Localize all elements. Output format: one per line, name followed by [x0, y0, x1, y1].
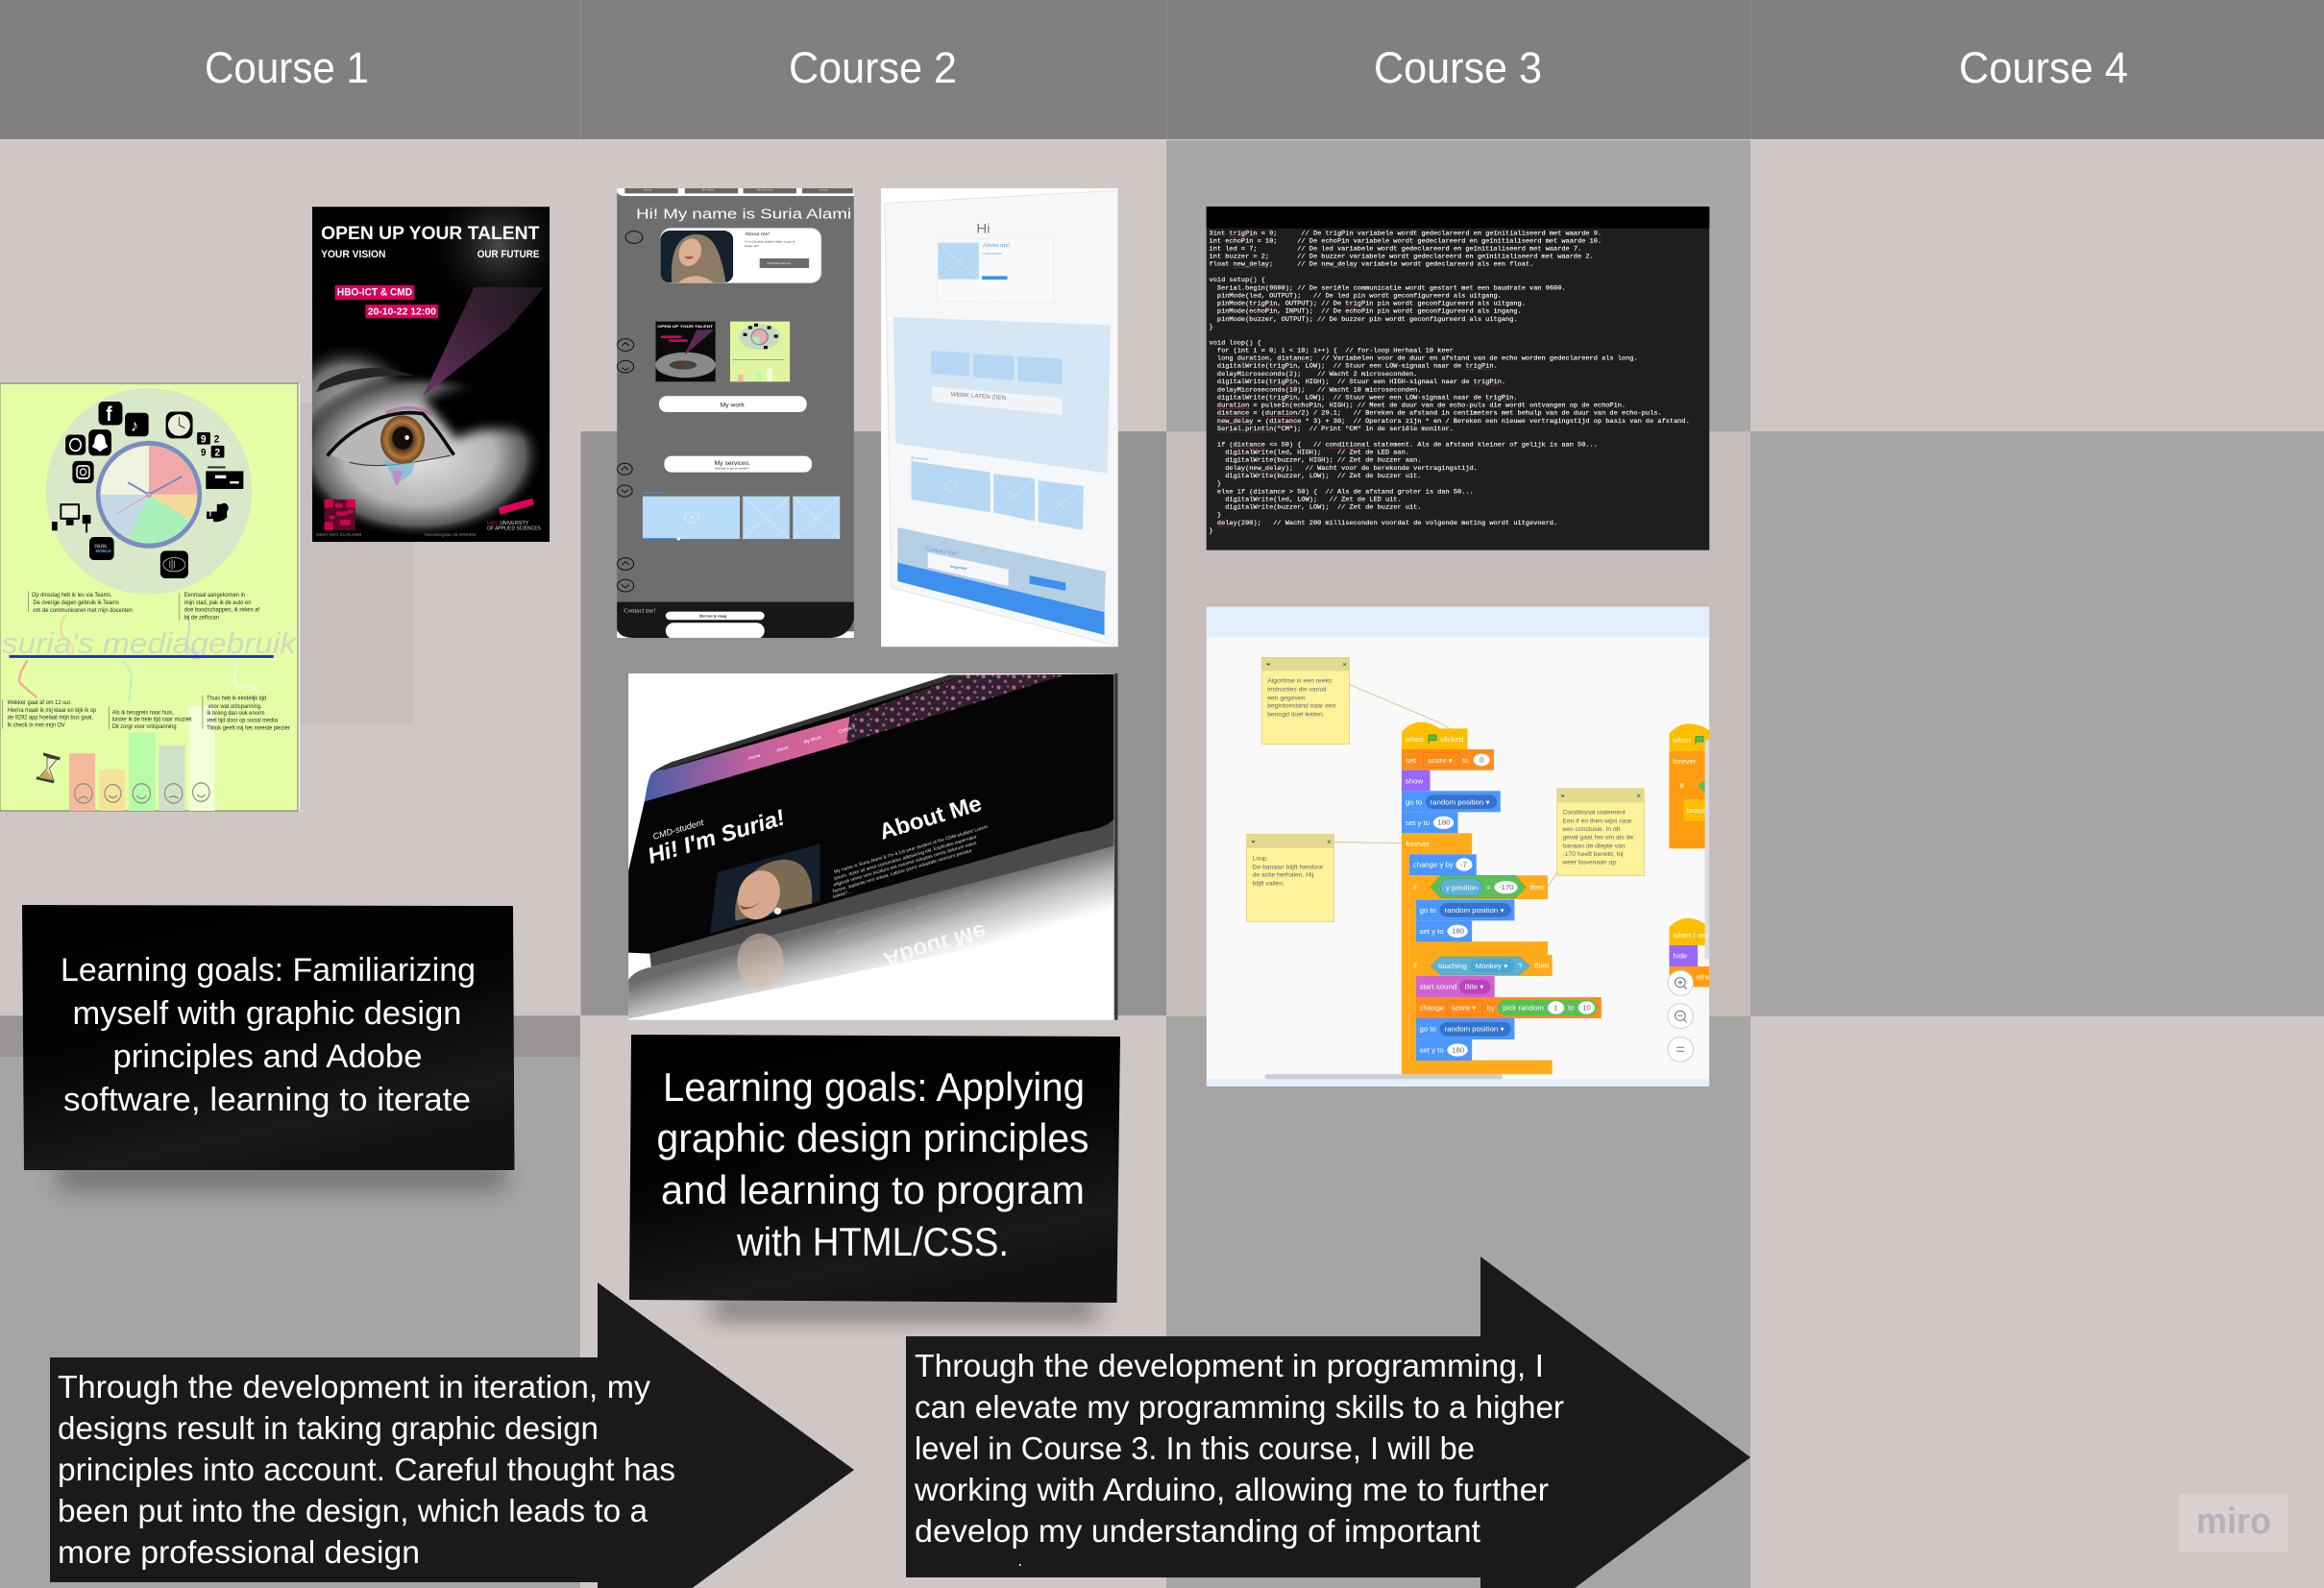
work thumbnails	[655, 322, 790, 381]
code blocks stack: by	[1486, 1004, 1495, 1013]
code blocks stack: y position	[1446, 884, 1478, 892]
text: home note	[202, 696, 290, 731]
code blocks clipped right: forever	[1673, 757, 1697, 766]
note: Conditional statement: Een if en then wijst naar	[1562, 818, 1632, 824]
code blocks stack: if	[1413, 883, 1418, 892]
note: Conditional statement: geval gaat het om als de	[1562, 835, 1634, 842]
code blocks stack: pick random	[1503, 1004, 1544, 1013]
poster sublines	[321, 250, 540, 257]
hero heading: CMD-student	[651, 818, 705, 842]
text: music note: Dit zorgt voor ontspanning	[112, 724, 177, 730]
panel: website wireframe	[881, 188, 1118, 647]
poster logo: HAN_UNIVERSITY	[487, 521, 529, 526]
code listing: pinMode(echoPin, INPUT); // De echoPin pin wordt geconfigureerd als ingang.	[1210, 308, 1522, 316]
panel: arduino code	[1191, 187, 1709, 550]
code listing: }	[1210, 527, 1213, 535]
contact footer: Stel hier je vraag	[699, 614, 726, 618]
code listing: 3int trigPin = 9; // De trigPin variabele wordt gedeclareerd en geïnitialiseerd met waarde 9.	[1210, 231, 1602, 237]
code listing: }	[1210, 512, 1221, 520]
code blocks stack: Monkey ▾	[1476, 962, 1507, 970]
web heading: Hi! My name is Suria Alami	[636, 207, 851, 223]
logo: miro watermark: miro	[2196, 1502, 2271, 1542]
reflection: About Me	[880, 918, 989, 971]
note: Algoritme: ✕	[1342, 662, 1348, 669]
contact footer	[617, 602, 854, 639]
code blocks stack: 180	[1437, 818, 1450, 827]
code blocks stack: to	[1462, 756, 1469, 765]
code blocks stack: then	[1534, 962, 1549, 970]
text: Teams note: Op dinsdag heb ik les via Teams.	[32, 593, 112, 599]
text: iteration reflection: principles into account. Careful thought has	[58, 1453, 675, 1488]
browser bar and gradient nav: My Work	[803, 735, 822, 745]
code listing: digitalWrite(led, HIGH); // Zet de LED aan.	[1210, 450, 1409, 457]
wireframe about card	[937, 238, 1054, 303]
text: alarm note: Ik check in met mijn OV	[8, 722, 65, 729]
note: Loop: ✕	[1327, 840, 1333, 846]
panel: scratch code editor	[1207, 607, 1711, 1087]
code blocks stack: then	[1529, 883, 1545, 892]
text: music note: Als ik terugreis naar huis,	[112, 710, 174, 716]
code blocks stack: random position ▾	[1445, 906, 1504, 915]
code blocks stack: if	[1413, 962, 1418, 970]
code listing: if (distance <= 50) { // conditional statement. Als de afstand kleiner of gelijk is aan 50...	[1210, 441, 1598, 449]
wireframe about card: Lorem ipsum	[982, 252, 1002, 256]
text: iteration reflection: Through the development in iteration, my	[58, 1370, 650, 1405]
code listing: new_delay = (distance * 3) + 30; // Operators zijn * en / Bereken een nieuwe vertragingstijd op basis van de afstand.	[1210, 418, 1690, 426]
code blocks stack: set y to	[1406, 818, 1430, 827]
zoom controls	[1668, 970, 1693, 1062]
code blocks stack: score ▾	[1428, 756, 1453, 765]
poster sublines: OUR FUTURE	[477, 250, 539, 260]
text: self-scan note: Eenmaal aangekomen in	[184, 593, 245, 599]
text: learning goals 2: and learning to program	[661, 1167, 1085, 1212]
text: learning goals 2: Learning goals: Applying	[663, 1064, 1085, 1110]
text: learning goals 2: with HTML/CSS.	[736, 1219, 1009, 1264]
logo: miro watermark	[2179, 1494, 2288, 1552]
note: Algoritme: een gegeven	[1267, 695, 1306, 701]
panel: media use infographic	[0, 383, 300, 811]
code listing: for (int i = 0; i < 10; i++) { // for-loop Herhaal 10 keer	[1210, 348, 1454, 355]
arrow: course 1 to 2	[50, 1283, 854, 1588]
code listing: int buzzer = 2; // De buzzer variabele wordt gedeclareerd en geïnitialiseerd met waarde 2.	[1210, 254, 1594, 261]
code listing: pinMode(trigPin, OUTPUT); // De trigPin pin wordt geconfigureerd als uitgang.	[1210, 301, 1526, 308]
note: Algoritme	[1261, 657, 1350, 745]
code blocks clipped right: when I rec	[1673, 931, 1708, 940]
scroll icons	[617, 232, 643, 592]
text: Teams note: om de communiceren met mijn docenten	[33, 608, 133, 614]
header row	[0, 0, 2324, 140]
code listing: delayMicroseconds(10); // Wacht 10 microseconden.	[1210, 386, 1422, 394]
about heading: About Me	[876, 792, 985, 845]
text: self-scan note: doe boodschappen, ik reken af	[184, 607, 259, 614]
reflection: My name is Suria Alami & I'm a 1st-year student of the CDM-studies! Lorem	[834, 899, 984, 949]
code blocks stack: 180	[1452, 927, 1464, 936]
code listing: }	[1210, 480, 1221, 488]
poster tag: date	[365, 305, 438, 318]
code blocks stack: 0	[1480, 756, 1483, 764]
text: programming reflection: can elevate my programming skills to a higher	[915, 1390, 1564, 1426]
poster logo: Ruitenberglaan 26 ARNHEM	[425, 532, 477, 537]
browser bar and gradient nav	[645, 675, 1064, 801]
services placeholders	[643, 492, 840, 540]
reflection: eligendi nemo veni incidunt nisi maxime voluptas omnis dolorum natus	[833, 889, 973, 936]
text: learning goals 2: graphic design principles	[657, 1115, 1089, 1160]
code blocks stack: change y by	[1413, 861, 1454, 869]
text: home note: Thuis heb ik eindelijk tijd	[207, 696, 266, 702]
poster logo: MEER INFO SCAN HIER	[316, 532, 361, 537]
text: iteration reflection	[58, 1370, 675, 1571]
note: Conditional statement: banaan de diepte van	[1562, 843, 1626, 849]
heading: Course 1: Course 1	[205, 43, 369, 92]
work thumbnails: OPEN UP YOUR TALENT	[657, 325, 714, 329]
code listing: duration = pulseIn(echoPin, HIGH); // Meet de duur van de echo-puls die wordt ontvangen op de echoPin.	[1210, 403, 1626, 410]
heading: Course 2: Course 2	[789, 43, 957, 92]
code blocks stack: =	[1486, 884, 1491, 892]
wireframe services: My services	[911, 455, 928, 461]
code listing: digitalWrite(buzzer, LOW); // Zet de buzzer uit.	[1210, 473, 1422, 480]
code blocks stack: change	[1419, 1004, 1444, 1013]
pill: My work	[659, 396, 807, 412]
code listing: delay(new_delay); // Wacht voor de berekende vertragingstijd.	[1210, 465, 1478, 473]
text: alarm note: de 9292 app hoelaat mijn bus gaat.	[8, 715, 93, 721]
note: Loop: Loop	[1253, 856, 1267, 863]
text: programming reflection: Through the development in programming, I	[915, 1349, 1544, 1384]
code blocks stack: random position ▾	[1445, 1025, 1504, 1034]
code blocks clipped right: if	[1680, 782, 1684, 791]
text: home note: Ik breng dan ook enorm	[207, 711, 265, 717]
code blocks stack: set y to	[1419, 1046, 1444, 1055]
wireframe work section	[893, 317, 1111, 474]
code blocks stack: when	[1405, 735, 1424, 744]
clock dial with apps: 9	[201, 434, 207, 446]
text: home note: Tiktok geeft mij het meeste plezier	[207, 725, 290, 731]
code listing: Serial.println("CM"); // Print "CM" in de seriële monitor.	[1210, 426, 1454, 433]
note: Conditional statement: ✕	[1636, 794, 1642, 800]
panel: learning goals course 1	[22, 905, 515, 1189]
code blocks clipped right: when	[1672, 736, 1691, 745]
poster tag: date: 20-10-22 12:00	[368, 306, 436, 318]
code blocks stack: -7	[1460, 861, 1467, 868]
about paragraph: ipsum, dolor sit amet consectetur adipisicing elit. Explicabo aspernatur	[833, 834, 978, 882]
nav bar	[617, 187, 854, 196]
heading: Course 3: Course 3	[1374, 43, 1542, 92]
code listing: digitalWrite(trigPin, LOW); // Stuur een LOW-signaal naar de trigPin.	[1210, 363, 1498, 371]
note: Conditional statement: weer bovenaan op	[1561, 859, 1616, 866]
wireframe contact	[897, 527, 1106, 635]
nav bar: contact	[819, 187, 829, 191]
contact footer: Contact me!	[624, 608, 656, 615]
poster tag: HBO-ICT & CMD: HBO-ICT & CMD	[337, 287, 412, 299]
text: home note: voor wat ontspanning.	[208, 704, 262, 710]
text: programming reflection: develop my understanding of important	[915, 1514, 1481, 1550]
panel: open up your talent poster	[311, 207, 550, 542]
pill: My services	[664, 456, 812, 473]
about card: know me?	[745, 244, 759, 248]
wireframe heading: Hi	[976, 222, 991, 237]
text: alarm note: Hierna maak ik mij klaar en kijk ik op	[8, 708, 97, 714]
text: learning goals 1: myself with graphic design	[73, 995, 461, 1032]
about paragraph: My name is Suria Alami & I'm a 1st-year student of the CDM-studies! Lorem	[833, 824, 989, 875]
clock dial with apps: 2	[214, 448, 220, 459]
text: learning goals 1	[61, 952, 476, 1118]
text: alarm note	[2, 699, 97, 729]
text: learning goals 2	[657, 1064, 1089, 1264]
code listing: delayMicroseconds(2); // Wacht 2 microseconden.	[1210, 371, 1417, 379]
code blocks stack: touching	[1438, 962, 1467, 970]
code listing: int led = 7; // De led variabele wordt gedeclareerd en geïnitialiseerd met waarde 7.	[1210, 246, 1581, 253]
text: learning goals 1: software, learning to iterate	[63, 1082, 471, 1118]
title: suria's mediagebruik: suria's mediagebruik	[2, 628, 298, 660]
text: iteration reflection: designs result in taking graphic design	[58, 1411, 599, 1447]
code listing: Serial.begin(9600); // De seriële communicatie wordt gestart met een baudrate van 9600.	[1210, 284, 1566, 292]
about paragraph: facere, sapiente rem soluta. Labore porro voluptate nesciunt pariatur	[832, 848, 973, 894]
reflection	[737, 889, 989, 988]
poster logo	[316, 499, 541, 537]
code blocks stack: forever	[1407, 840, 1430, 848]
text: alarm note: Wekker gaat af om 12 uur.	[8, 700, 72, 706]
nav bar: My Work	[702, 187, 715, 191]
panel: learning goals course 2	[629, 1035, 1120, 1318]
clock dial with apps: MOBILE	[96, 549, 111, 553]
code blocks stack: score ▾	[1452, 1004, 1476, 1013]
code listing: pinMode(buzzer, OUTPUT); // De buzzer pin wordt geconfigureerd als uitgang.	[1210, 316, 1518, 324]
about paragraph: soluta?...	[832, 889, 852, 900]
heading: Course 4: Course 4	[1959, 43, 2128, 92]
code blocks stack: -170	[1499, 883, 1514, 892]
text: music note: luister ik de hele tijd naar muziek	[112, 717, 193, 723]
text: programming reflection: working with Arduino, allowing me to further	[914, 1473, 1549, 1508]
text: self-scan note: bij de zelfscan	[184, 615, 219, 622]
clock dial with apps: f	[106, 403, 112, 426]
panel: laptop portfolio mockup	[628, 673, 1117, 1020]
poster headline: OPEN UP YOUR TALENT	[321, 222, 540, 243]
note: Algoritme: instructies die vanuit	[1267, 686, 1327, 693]
code blocks stack: set y to	[1419, 927, 1444, 936]
wireframe work section: WERK LATEN ZIEN	[950, 391, 1006, 402]
about card: I'm a 1st year student! Want to get to	[745, 240, 795, 244]
code listing: void setup() {	[1210, 277, 1265, 284]
text: programming reflection	[914, 1349, 1564, 1566]
panel: website mockup dark	[617, 187, 854, 639]
text: iteration reflection: been put into the design, which leads to a	[58, 1494, 648, 1529]
code blocks stack: show	[1406, 777, 1424, 785]
note: Conditional statement: -170 heeft bereikt, hij	[1562, 851, 1624, 858]
code blocks stack: 1	[1553, 1004, 1557, 1013]
clock dial with apps: 9	[201, 448, 207, 459]
code listing: digitalWrite(trigPin, LOW); // Stuur weer een LOW-signaal naar de trigPin.	[1210, 394, 1518, 402]
clock dial with apps: T	[208, 509, 212, 519]
code listing: delay(200); // Wacht 200 milliseconden voordat de volgende meting wordt uitgevoerd.	[1210, 520, 1557, 527]
nav bar: Home	[644, 187, 652, 191]
code blocks stack: clicked	[1440, 735, 1463, 744]
code listing: }	[1210, 324, 1213, 331]
code listing: digitalWrite(buzzer, HIGH); // Zet de buzzer aan.	[1210, 457, 1422, 465]
code listing: digitalWrite(led, LOW); // Zet de LED uit.	[1210, 496, 1402, 503]
pill: My services: Wat kan ik jou te bieden?	[715, 467, 749, 471]
text: music note	[109, 706, 193, 730]
nav bar: My services	[757, 187, 773, 191]
note: Algoritme: Algoritme is een reeks	[1267, 678, 1333, 685]
text: home note: veel tijd door op social media	[207, 718, 279, 723]
wireframe services	[911, 455, 1084, 530]
about card	[660, 229, 821, 282]
text: self-scan note	[179, 593, 259, 622]
code blocks clipped right: hide	[1673, 952, 1687, 961]
code blocks stack: go to	[1406, 798, 1422, 806]
text: self-scan note: mijn stad, pak ik de auto en	[184, 600, 251, 606]
code blocks stack: ?	[1518, 962, 1522, 970]
reflection: ipsum, dolor sit amet consectetur adipisicing elit. Explicabo aspernatur	[834, 895, 973, 941]
code listing: digitalWrite(buzzer, LOW); // Zet de buzzer uit.	[1210, 504, 1422, 512]
code listing: int echoPin = 10; // De echoPin variabele wordt gedeclareerd en geïnitialiseerd met waarde 10.	[1210, 238, 1602, 245]
text: iteration reflection: more professional design	[58, 1535, 420, 1571]
code blocks stack	[1402, 722, 1602, 1074]
wireframe about card: About me!	[982, 242, 1011, 249]
poster logo: OF APPLIED SCIENCES	[487, 525, 541, 532]
code blocks stack: start sound	[1419, 983, 1456, 991]
code blocks stack: to	[1568, 1004, 1575, 1013]
about card: DOWNLOAD CV	[768, 261, 792, 265]
clock dial with apps: 2	[214, 434, 219, 446]
clock dial with apps: ♪	[131, 416, 138, 435]
code listing: digitalWrite(trigPin, HIGH); // Stuur een HIGH-signaal naar de trigPin.	[1210, 379, 1505, 386]
note: Conditional statement: Conditional statement	[1562, 810, 1626, 817]
code blocks stack: set	[1406, 756, 1417, 765]
note: Algoritme: beoogd doel leiden.	[1267, 711, 1325, 718]
poster QR code	[325, 500, 355, 530]
clock dial with apps	[46, 388, 252, 595]
code listing: void loop() {	[1210, 339, 1261, 347]
wireframe contact: Contact me!	[924, 546, 959, 557]
text: programming reflection: level in Course 3. In this course, I will be	[915, 1431, 1475, 1467]
note: Loop: De banaan blijft hierdoor	[1253, 864, 1324, 870]
code blocks stack: random position ▾	[1431, 798, 1490, 806]
note: Algoritme: begintoestand naar een	[1267, 703, 1336, 710]
note: Loop: de actie herhalen. Hij	[1253, 872, 1314, 879]
icon: hourglass	[37, 752, 61, 783]
wireframe contact: Vragenlijst	[949, 565, 968, 571]
about paragraph: eligendi nemo veni incidunt nisi maxime voluptas omnis dolorum natus	[833, 841, 978, 889]
note: Loop: blijft vallen.	[1253, 880, 1284, 887]
code blocks stack: 180	[1452, 1046, 1464, 1054]
code blocks stack: go to	[1419, 1025, 1436, 1034]
code listing: long duration, distance; // Variabelen voor de duur en afstand van de echo worden gedeclareerd als long.	[1210, 355, 1638, 363]
code blocks stack: Bite ▾	[1465, 983, 1483, 991]
text: Teams note: De overige dagen gebruik ik Teams	[33, 600, 119, 606]
about card: About me!	[745, 232, 770, 237]
browser bar and gradient nav: About	[775, 745, 790, 754]
bar chart: mood	[69, 706, 214, 811]
browser bar and gradient nav: Home	[747, 752, 762, 762]
code listing: float new_delay; // De new_delay variabele wordt gedeclareerd als een float.	[1210, 261, 1533, 269]
hero heading: Hi! I'm Suria!	[645, 806, 788, 869]
code blocks stack: 10	[1582, 1004, 1591, 1013]
code blocks stack: go to	[1419, 906, 1436, 915]
timeline line	[10, 655, 274, 658]
code listing: distance = (duration/2) / 29.1; // Bereken de afstand in centimeters met behulp van de duur van de echo-puls.	[1210, 410, 1662, 418]
code blocks clipped right	[1669, 723, 1711, 987]
pill: My services: My services.	[715, 460, 750, 467]
note: Conditional statement	[1557, 789, 1644, 876]
code listing: else if (distance > 50) { // Als de afstand groter is dan 50...	[1210, 488, 1474, 496]
code blocks clipped right: broad	[1687, 806, 1706, 815]
pill: My work: My work	[721, 402, 746, 408]
text: learning goals 1: principles and Adobe	[113, 1038, 423, 1075]
note: Loop	[1246, 834, 1334, 921]
about paragraph	[832, 824, 989, 900]
poster sublines: YOUR VISION	[321, 250, 385, 260]
note: Conditional statement: een conclusie. In dit	[1562, 826, 1620, 833]
portrait	[710, 843, 820, 934]
text: Teams note	[28, 591, 133, 614]
clock dial with apps: PARK	[94, 544, 108, 550]
browser bar and gradient nav: Contact!	[838, 724, 857, 735]
arrow: course 2 to 3	[906, 1257, 1750, 1588]
code listing: pinMode(led, OUTPUT); // De led pin wordt geconfigureerd als uitgang.	[1210, 292, 1502, 300]
text: learning goals 1: Learning goals: Familiarizing	[61, 952, 476, 989]
code blocks clipped right: othe	[1696, 973, 1711, 982]
